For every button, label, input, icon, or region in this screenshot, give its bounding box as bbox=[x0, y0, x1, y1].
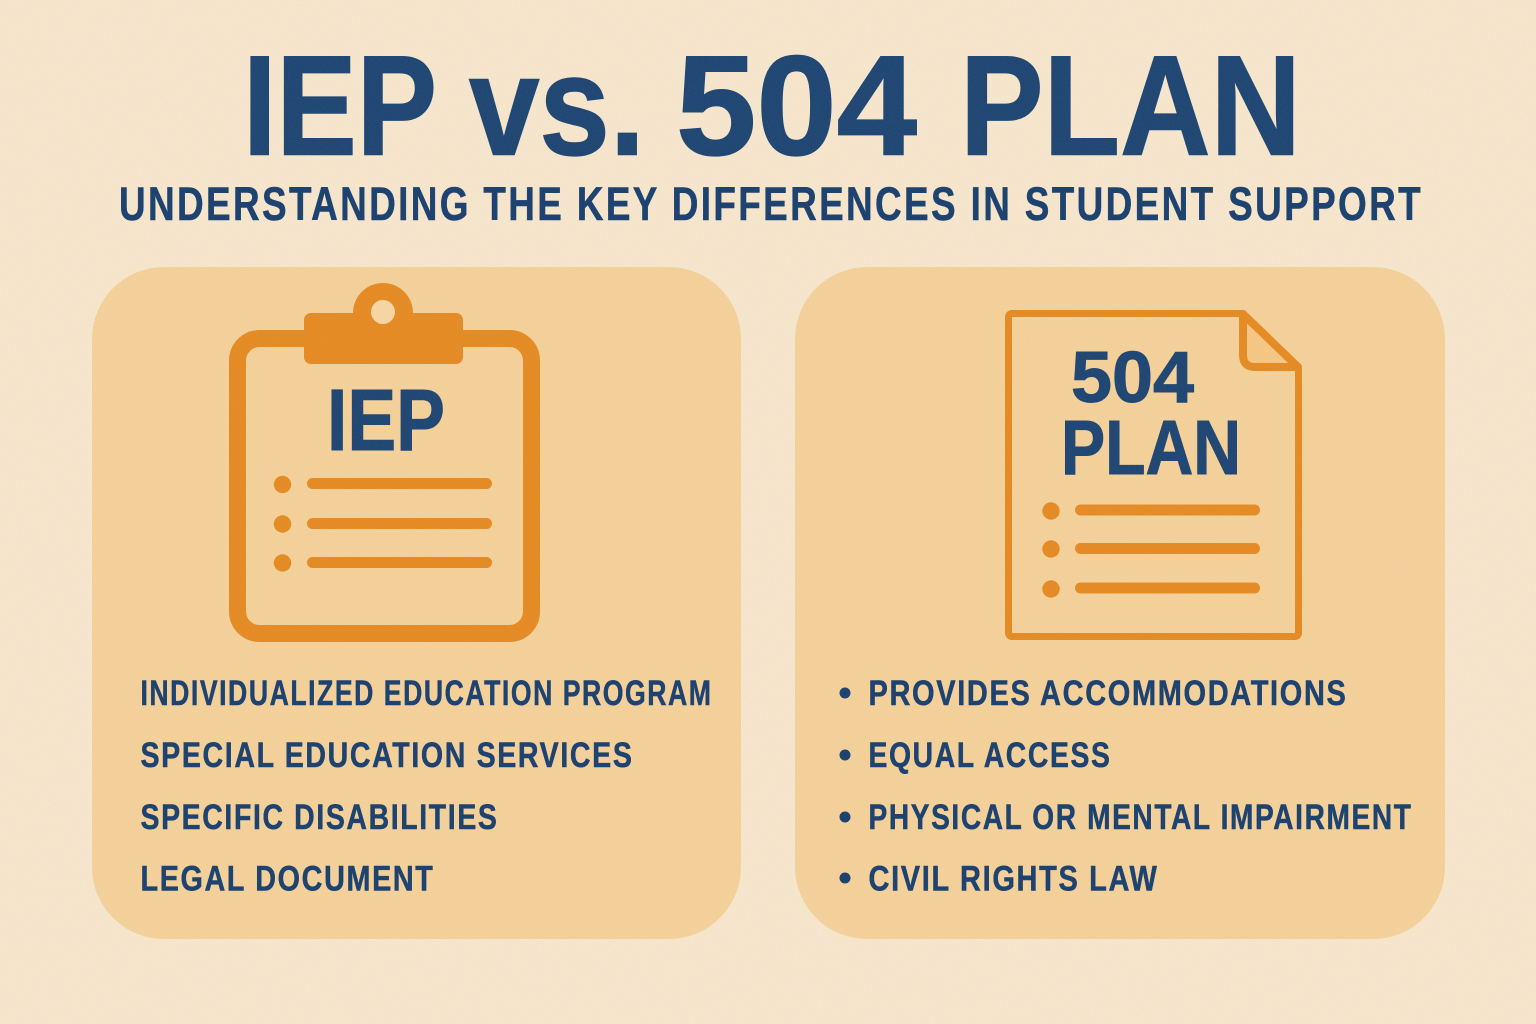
list: 504 features: CIVIL RIGHTS LAW bbox=[868, 860, 1158, 898]
list: 504 features: PHYSICAL OR MENTAL IMPAIRMENT bbox=[868, 798, 1412, 837]
panel: 504 Plan bbox=[795, 267, 1445, 939]
title: IEP bbox=[243, 26, 437, 186]
list: IEP features: INDIVIDUALIZED EDUCATION PROGRAM bbox=[140, 674, 712, 713]
list: 504 features bbox=[840, 674, 1412, 898]
list: 504 features: EQUAL ACCESS bbox=[868, 736, 1112, 775]
list: IEP features: SPECIFIC DISABILITIES bbox=[140, 798, 498, 837]
panel: IEP bbox=[92, 267, 741, 939]
icon label: 504: 504 bbox=[1071, 338, 1194, 418]
list: IEP features bbox=[140, 674, 712, 898]
icon: clipboard bbox=[238, 283, 532, 634]
icon: document bbox=[1008, 314, 1298, 636]
title bbox=[243, 26, 1301, 186]
list: 504 features: PROVIDES ACCOMMODATIONS bbox=[868, 674, 1348, 713]
icon label: IEP: IEP bbox=[327, 372, 445, 469]
icon: checklist lines bbox=[274, 476, 492, 572]
title: vs. bbox=[469, 26, 645, 186]
icon: checklist lines bbox=[1042, 502, 1260, 598]
title: 504 bbox=[676, 26, 917, 186]
list: IEP features: SPECIAL EDUCATION SERVICES bbox=[140, 736, 634, 775]
title: PLAN bbox=[960, 26, 1301, 186]
icon label: PLAN: PLAN bbox=[1061, 405, 1241, 491]
list: IEP features: LEGAL DOCUMENT bbox=[140, 860, 434, 898]
